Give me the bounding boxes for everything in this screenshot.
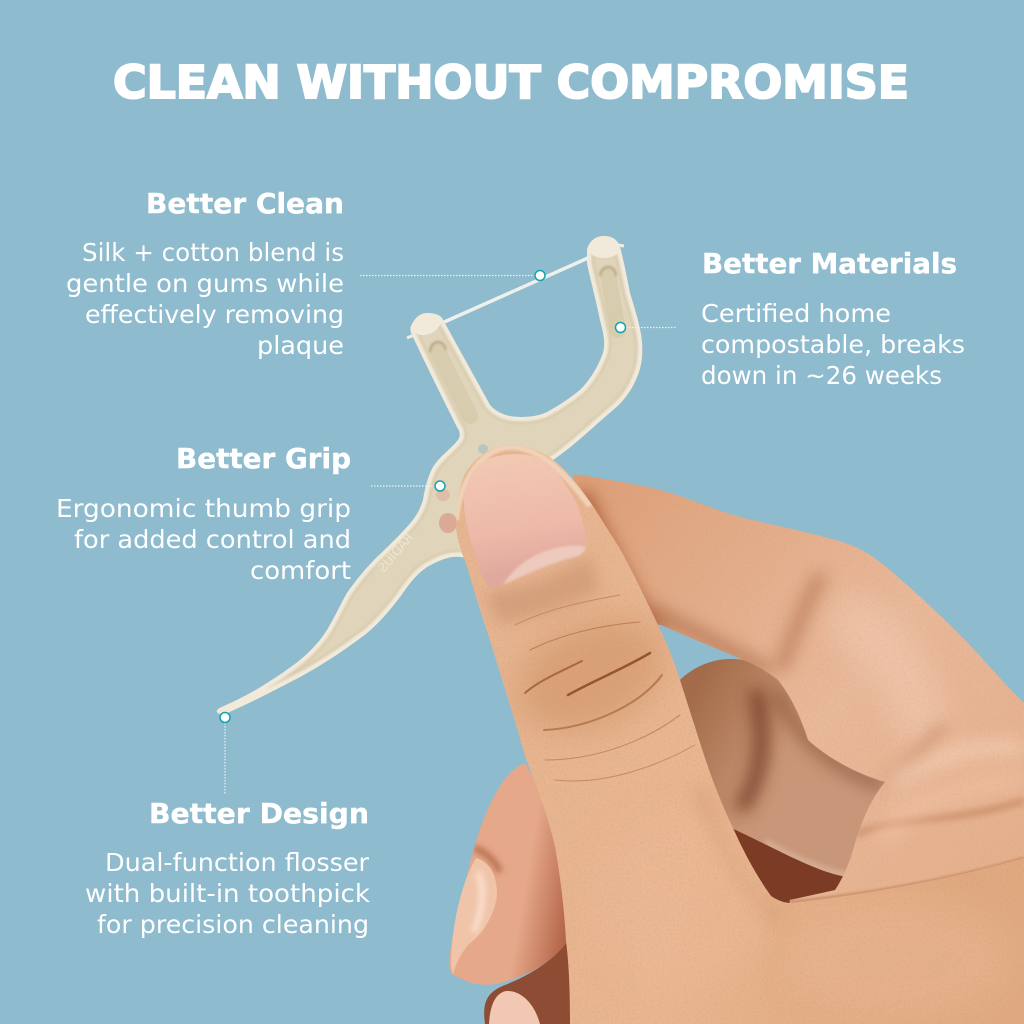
thumb nail	[464, 454, 586, 589]
callout: better materials	[701, 247, 965, 390]
text: better materials description	[701, 299, 965, 390]
ring finger nail	[451, 858, 497, 975]
callout: better design	[85, 797, 371, 939]
thumb	[450, 445, 1024, 1024]
heading: better grip: Better Grip	[176, 442, 351, 475]
index finger and palm	[573, 474, 1024, 904]
text: better materials description: Certified home	[701, 299, 891, 328]
knuckle shading	[510, 612, 670, 738]
little finger	[484, 940, 580, 1024]
thumb tip rim	[456, 447, 590, 520]
text: better clean description: plaque	[257, 331, 344, 360]
flosser rim and channels	[217, 236, 642, 714]
annotation: better design leader	[220, 712, 230, 794]
flosser brand mark: RADIUS	[376, 531, 417, 576]
ring finger	[449, 763, 575, 985]
heading: better clean: Better Clean	[146, 187, 344, 220]
annotation: better materials leader	[616, 322, 676, 332]
text: better materials description: compostable, breaks	[701, 330, 965, 359]
text: better clean description: effectively removing	[85, 300, 344, 329]
text: better grip description	[56, 494, 351, 585]
heading: better materials: Better Materials	[702, 247, 957, 280]
knuckle creases	[515, 595, 695, 781]
text: better clean description: gentle on gums while	[66, 269, 344, 298]
title: CLEAN WITHOUT COMPROMISE	[113, 56, 909, 109]
text: better grip description: for added control and	[74, 525, 351, 554]
text: better clean description: Silk + cotton blend is	[82, 238, 344, 267]
text: better clean description	[66, 238, 344, 360]
flosser right slot	[608, 275, 618, 330]
palm crease	[790, 858, 1024, 902]
text: better design description: for precision cleaning	[97, 910, 369, 939]
callout: better grip	[56, 442, 351, 585]
flosser left slot	[437, 350, 470, 416]
flosser grip holes	[436, 444, 488, 533]
heading: better design: Better Design	[149, 797, 369, 830]
text: better grip description: Ergonomic thumb grip	[56, 494, 351, 523]
flosser body	[217, 236, 642, 714]
text: better design description: Dual-function flosser	[105, 848, 370, 877]
text: better design description	[85, 848, 371, 939]
callout: better clean	[66, 187, 344, 360]
text: better grip description: comfort	[250, 556, 351, 585]
flosser	[217, 236, 642, 714]
dark gap between fingers	[700, 790, 850, 910]
middle finger	[680, 658, 885, 876]
annotation: better clean leader	[360, 270, 545, 280]
text: better design description: with built-in toothpick	[85, 879, 371, 908]
hand	[449, 445, 1024, 1024]
text: better materials description: down in ~26 weeks	[701, 361, 942, 390]
floss strand	[407, 245, 624, 338]
little finger nail	[489, 991, 540, 1024]
flosser head caps	[587, 236, 621, 258]
annotation: better grip leader	[371, 481, 445, 491]
